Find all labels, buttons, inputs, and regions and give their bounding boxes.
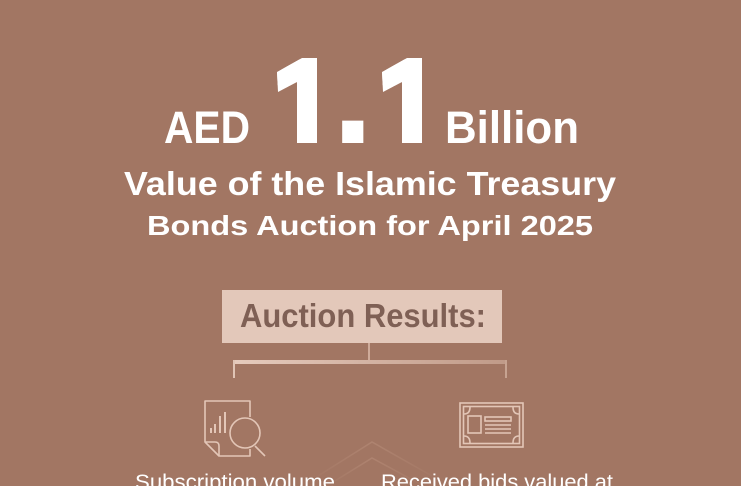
- subtitle: [124, 165, 617, 241]
- big number: .: [332, 7, 374, 175]
- icon: certificate: [460, 403, 523, 447]
- headline value: [165, 58, 576, 144]
- subtitle line 1: Value of the Islamic Treasury: [124, 165, 617, 202]
- panel: auction results heading: Auction Results:: [240, 297, 486, 334]
- connector: [233, 343, 507, 378]
- subtitle line 2: Bonds Auction for April 2025: [147, 210, 593, 241]
- panel: auction results heading: [222, 290, 502, 343]
- big number: 1: [268, 33, 336, 169]
- unit label: Billion: [445, 102, 579, 153]
- icon: report with magnifier: [205, 401, 265, 456]
- decorative roof motif: [318, 442, 432, 484]
- currency label: AED: [164, 102, 250, 153]
- big number: 1: [373, 33, 441, 169]
- big number: [277, 58, 422, 143]
